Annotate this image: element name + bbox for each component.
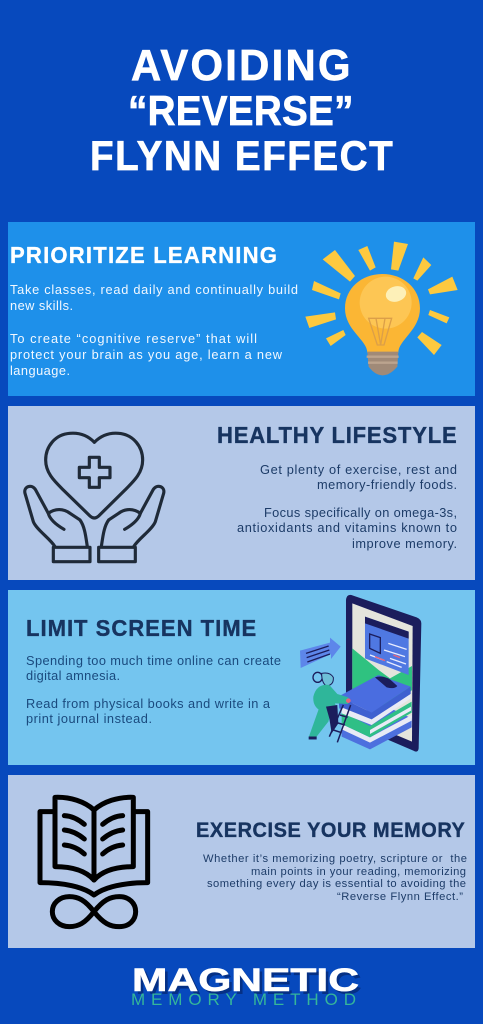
title xyxy=(90,41,393,179)
heading: healthy lifestyle: HEALTHY LIFESTYLE xyxy=(217,421,457,448)
text block: exercise your memory: “Reverse Flynn Effect.” xyxy=(337,891,463,903)
text block: prioritize learning: new skills. xyxy=(10,298,73,313)
icon: hands holding heart xyxy=(25,433,164,562)
logo: magnetic memory method xyxy=(131,962,362,1009)
text block: prioritize learning: To create “cognitive reserve” that will xyxy=(10,331,257,346)
text block: healthy lifestyle: antioxidants and vitamins known to xyxy=(237,520,457,535)
text block: healthy lifestyle: memory-friendly foods. xyxy=(317,477,457,492)
text block: prioritize learning xyxy=(10,282,298,378)
heading: exercise your memory: EXERCISE YOUR MEMORY xyxy=(196,819,465,842)
text block: limit screen time: Read from physical books and write in a xyxy=(26,696,271,711)
title: AVOIDING xyxy=(131,41,350,90)
text block: exercise your memory xyxy=(203,853,467,903)
heading: limit screen time: LIMIT SCREEN TIME xyxy=(26,614,256,641)
text block: limit screen time: digital amnesia. xyxy=(26,668,120,683)
text block: exercise your memory: something every day is essential to avoiding the xyxy=(207,878,466,890)
logo: magnetic memory method: MAGNETIC xyxy=(135,965,362,1001)
stacked books xyxy=(338,675,412,749)
logo: magnetic memory method: MAGNETIC xyxy=(132,962,359,998)
heading: prioritize learning: PRIORITIZE LEARNING xyxy=(10,241,277,268)
logo: magnetic memory method: MEMORY METHOD xyxy=(131,990,356,1009)
text block: limit screen time: Spending too much time online can create xyxy=(26,653,281,668)
text block: limit screen time: print journal instead. xyxy=(26,711,152,726)
text block: prioritize learning: Take classes, read daily and continually build xyxy=(10,282,298,297)
icon: light bulb xyxy=(305,242,458,375)
icon: open book with infinity symbol xyxy=(40,797,148,927)
text block: healthy lifestyle: improve memory. xyxy=(352,536,457,551)
illustration: phone with books and reader xyxy=(300,595,421,752)
person on ladder xyxy=(309,672,351,742)
title: FLYNN EFFECT xyxy=(90,131,393,179)
text block: healthy lifestyle xyxy=(237,462,457,551)
phone xyxy=(346,595,421,752)
text block: prioritize learning: language. xyxy=(10,363,70,378)
panel: healthy lifestyle xyxy=(8,406,475,580)
text block: limit screen time xyxy=(26,653,281,726)
text block: healthy lifestyle: Get plenty of exercise, rest and xyxy=(260,462,457,477)
panel: prioritize learning xyxy=(8,222,475,396)
text block: healthy lifestyle: Focus specifically on omega-3s, xyxy=(264,505,457,520)
text block: exercise your memory: Whether it’s memorizing poetry, scripture or the xyxy=(203,853,467,865)
text block: prioritize learning: protect your brain as you age, learn a new xyxy=(10,347,283,362)
title: “REVERSE” xyxy=(128,86,353,134)
panel: limit screen time xyxy=(8,590,475,765)
text block: exercise your memory: main points in your reading, memorizing xyxy=(251,866,466,878)
panel: exercise your memory xyxy=(8,775,475,948)
arrow: speech pointer xyxy=(300,638,341,668)
